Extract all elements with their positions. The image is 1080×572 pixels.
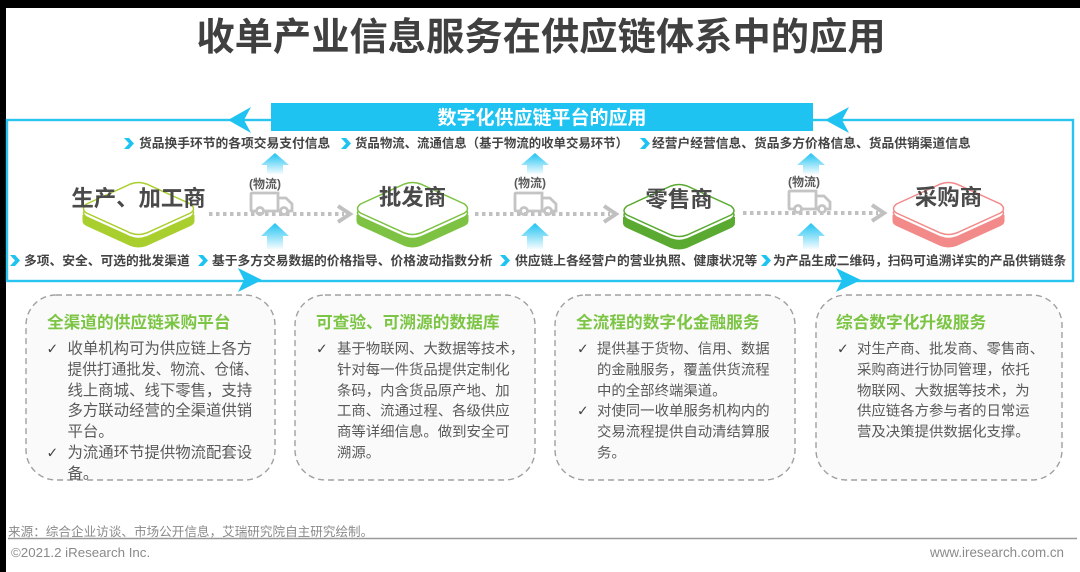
panel text	[837, 340, 1044, 440]
panel text: 为流通环节提供物流配套设	[68, 444, 252, 462]
panel heading: 全流程的数字化金融服务	[576, 312, 760, 332]
panel text: 供应链各方参与者的日常运	[857, 402, 1030, 420]
banner: platform application	[271, 103, 813, 131]
panel text: 提供基于货物、信用、数据	[597, 340, 770, 358]
node: buyer: 采购商	[915, 185, 982, 210]
logistics labels	[249, 174, 820, 191]
panel text	[316, 340, 524, 462]
panel text: 营及决策提供数据化支撑。	[857, 424, 1030, 440]
panel text: 备。	[68, 464, 98, 482]
logistics labels: (物流)	[788, 174, 820, 189]
panel text	[577, 340, 770, 462]
icon: truck 2	[515, 193, 556, 214]
panel text: 的金融服务，覆盖供货流程	[597, 362, 770, 378]
top information row: 经营户经营信息、货品多方价格信息、货品供销渠道信息	[652, 136, 971, 150]
panel text: ✓	[316, 342, 328, 358]
node: wholesaler: 批发商	[379, 185, 446, 210]
panel text: ✓	[837, 342, 849, 358]
panel text	[46, 338, 258, 482]
panel text: 线上商城、线下零售，支持	[68, 382, 252, 400]
node: buyer	[892, 182, 1004, 248]
top information row: 货品物流、流通信息（基于物流的收单交易环节）	[355, 136, 628, 150]
panel text: 基于物联网、大数据等技术，	[337, 340, 524, 358]
bottom information row: 为产品生成二维码，扫码可追溯详实的产品供销链条	[773, 253, 1066, 268]
top information row	[124, 136, 971, 150]
panel text: 对使同一收单服务机构内的	[597, 402, 770, 420]
panel text: 交易流程提供自动清结算服	[597, 422, 770, 440]
panel text: 收单机构可为供应链上各方	[68, 338, 252, 358]
arrow: top right	[825, 107, 849, 133]
logistics labels: (物流)	[514, 175, 546, 190]
panel: omni-channel procurement platform	[26, 295, 275, 482]
banner: platform application: 数字化供应链平台的应用	[437, 106, 647, 129]
up arrows: data flowing to top row	[261, 153, 825, 174]
arrow: bottom left	[238, 268, 262, 292]
arrow: top left	[228, 107, 251, 133]
panel text: 对生产商、批发商、零售商、	[857, 340, 1044, 358]
arrow: bottom right	[836, 268, 861, 292]
panel: full-process digital finance	[555, 295, 795, 480]
panel text: 溯源。	[337, 444, 380, 462]
top information row: 货品换手环节的各项交易支付信息	[139, 136, 330, 150]
panel text: 多方联动经营的全渠道供销	[68, 402, 252, 420]
panel heading: 全渠道的供应链采购平台	[47, 312, 231, 332]
node: retailer	[623, 184, 735, 250]
icon: truck 1	[251, 193, 292, 214]
panel text: 平台。	[68, 422, 114, 440]
panel text: ✓	[46, 446, 58, 462]
title: 收单产业信息服务在供应链体系中的应用	[196, 16, 886, 59]
logistics labels: (物流)	[249, 176, 281, 191]
node: producer	[71, 182, 206, 248]
icon: truck 3	[789, 191, 830, 212]
panel text: 商等详细信息。做到安全可	[337, 422, 510, 440]
panel: comprehensive digital upgrade	[816, 295, 1062, 480]
node: retailer: 零售商	[645, 187, 713, 212]
supply chain frame with arrows	[7, 107, 1073, 292]
bottom information row: 供应链上各经营户的营业执照、健康状况等	[515, 253, 757, 268]
node: producer: 生产、加工商	[71, 186, 206, 211]
panel text: 务。	[597, 444, 626, 462]
panel text: ✓	[577, 342, 589, 358]
panel text: 物联网、大数据等技术，为	[857, 382, 1030, 400]
panel: verifiable traceable database	[295, 295, 535, 480]
bottom information row: 基于多方交易数据的价格指导、价格波动指数分析	[212, 253, 493, 268]
copyright: ©2021.2 iResearch Inc.	[11, 545, 150, 560]
website: www.iresearch.com.cn	[929, 545, 1064, 560]
panel text: ✓	[577, 404, 589, 420]
panel text: 针对每一件货品提供定制化	[337, 362, 510, 378]
panel text: 中的全部终端渠道。	[597, 382, 727, 400]
panel heading: 综合数字化升级服务	[836, 312, 986, 332]
panel text: 采购商进行协同管理，依托	[857, 362, 1030, 378]
up arrows: data flowing from bottom row	[261, 223, 825, 249]
panel text: 工商、流通过程、各级供应	[337, 402, 510, 420]
panel text: ✓	[46, 342, 58, 358]
panel heading: 可查验、可溯源的数据库	[316, 312, 500, 332]
dotted logistics arrows	[209, 205, 884, 222]
source note: 来源：综合企业访谈、市场公开信息，艾瑞研究院自主研究绘制。	[8, 524, 373, 539]
panel text: 提供打通批发、物流、仓储、	[68, 360, 258, 378]
bottom information row	[10, 253, 1066, 268]
bottom information row: 多项、安全、可选的批发渠道	[24, 253, 190, 268]
node: wholesaler	[356, 182, 468, 248]
panel text: 条码，内含货品原产地、加	[337, 382, 510, 400]
